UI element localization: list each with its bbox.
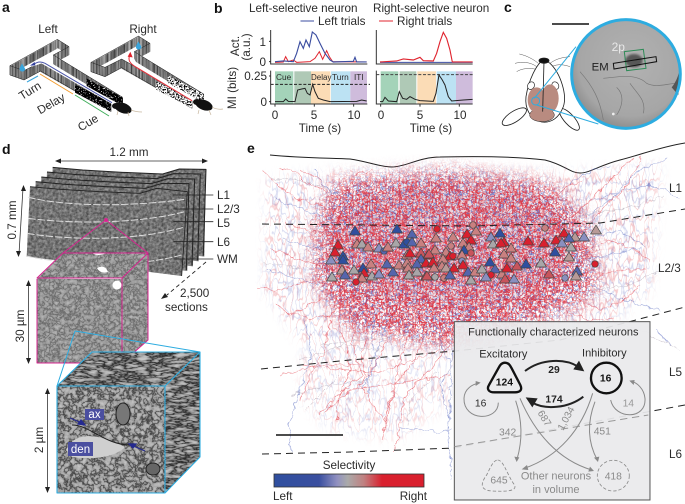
x tick labels: 10 <box>347 109 361 122</box>
chart labels: task epochs: ITI <box>354 72 364 82</box>
x tick labels: 5 <box>417 109 424 122</box>
layer labels: WM <box>217 253 238 266</box>
y tick labels: 0 <box>259 56 266 69</box>
legend: trial types: Left trials <box>318 15 366 28</box>
neuron reconstruction: red branches <box>258 155 650 450</box>
icon: mouse left <box>112 100 142 116</box>
inset: connectivity diagram: 418 <box>605 471 622 482</box>
scale bar <box>276 434 343 436</box>
legend: trial types: Right trials <box>397 15 452 28</box>
inset: cranial window image <box>572 20 681 128</box>
cortical layer labels: L6 <box>669 448 682 461</box>
inset: connectivity diagram <box>454 322 650 500</box>
inset: connectivity diagram: 451 <box>594 426 611 437</box>
cortical layer labels: L2/3 <box>658 262 681 275</box>
inset: connectivity diagram: 1,034 <box>556 405 578 432</box>
layer labels: L5 <box>217 217 231 230</box>
layer labels <box>217 189 240 266</box>
y tick labels: 1 <box>259 36 266 49</box>
chart labels: task epochs: Cue <box>276 72 292 82</box>
x axis title left: Time (s) <box>299 122 341 135</box>
neuron reconstruction: dense arbor texture <box>255 150 680 450</box>
inset: connectivity diagram: 124 <box>496 377 513 388</box>
inset: connectivity diagram: 29 <box>548 365 560 376</box>
inset: connectivity diagram: Inhibitory <box>582 348 627 360</box>
label: delay: Delay <box>35 91 68 117</box>
chart: right-selective neuron activity and MI <box>376 30 473 107</box>
chart labels: task epochs: Delay <box>311 73 331 82</box>
heading: Right: Right <box>129 23 157 36</box>
inset: connectivity diagram: 14 <box>623 399 634 410</box>
inset: connectivity diagram: in volume <box>532 484 579 496</box>
layer labels: L6 <box>217 236 230 249</box>
heading: Left: Left <box>38 23 58 36</box>
label: dendrite: den <box>71 444 90 456</box>
maze: left trial <box>10 39 123 112</box>
inset: connectivity diagram: Functionally characterized neurons <box>468 327 639 339</box>
x tick labels: 5 <box>311 109 318 122</box>
layer boundary: L2/3 to L5 <box>261 307 685 369</box>
layer boundary: L5 to L6 <box>262 405 685 454</box>
excitatory and inhibitory somata <box>326 222 602 285</box>
x tick labels: 0 <box>378 109 385 122</box>
magenta zoom cube <box>37 218 148 363</box>
scale bar <box>552 23 589 25</box>
arrow: delay <box>40 74 73 94</box>
inset: cranial window image: 2p <box>612 40 625 54</box>
panel e: reconstructed neurons <box>247 140 685 503</box>
inset: connectivity diagram: 342 <box>499 427 517 438</box>
icon: mouse head and brain <box>500 47 598 133</box>
arrow: axon marker <box>70 418 85 425</box>
layer boundary: L1 to L2/3 <box>262 209 685 226</box>
y tick labels: 0.25 <box>244 70 267 83</box>
panel a: T-maze task <box>2 0 223 134</box>
label: axon: ax <box>88 409 101 421</box>
inset: connectivity diagram: 174 <box>545 395 563 406</box>
pia surface line <box>270 143 685 173</box>
heading: left-selective neuron: Left-selective neuron <box>249 2 358 15</box>
inset: cranial window image: EM <box>592 62 609 74</box>
legend: selectivity colour bar: Left <box>273 490 293 503</box>
chart labels: task epochs <box>276 72 364 82</box>
heading: right-selective neuron: Right-selective neuron <box>373 2 489 15</box>
cortical layer labels <box>658 182 682 461</box>
dimension: sections <box>161 262 210 314</box>
inset: connectivity diagram: 16 <box>600 374 612 385</box>
dimension: 1.2 mm <box>55 146 208 164</box>
tissue section stack <box>26 167 213 276</box>
cortical layer labels: L5 <box>669 366 682 379</box>
dimension: 0.7 mm: 0.7 mm <box>6 201 19 239</box>
maze: right trial <box>91 36 204 108</box>
legend: selectivity colour bar <box>273 459 428 503</box>
inset: connectivity diagram: 16 <box>475 399 487 410</box>
label: cue: Cue <box>76 112 101 134</box>
axis label: a.u.: (a.u.) <box>240 33 253 61</box>
x tick labels <box>272 109 467 122</box>
legend: selectivity colour bar: Right <box>400 490 428 503</box>
cortical layer labels: L1 <box>669 182 682 195</box>
inset: connectivity diagram: 645 <box>490 476 508 487</box>
label: axon <box>85 409 104 421</box>
x tick labels: 10 <box>453 109 467 122</box>
dimension: 30 um: 30 µm <box>14 310 27 342</box>
dimension: 2 um <box>33 388 50 493</box>
label: dendrite <box>68 442 93 456</box>
chart labels: task epochs: Turn <box>332 72 349 82</box>
inset: connectivity diagram: Excitatory <box>479 349 528 361</box>
dimension: 1.2 mm: 1.2 mm <box>110 146 148 159</box>
panel c: cranial window <box>500 0 681 133</box>
blue zoom cube <box>57 331 200 493</box>
arrow: turn <box>27 76 38 82</box>
panel d: EM volume <box>2 141 240 493</box>
inset: connectivity diagram: Other neurons <box>521 471 592 483</box>
y tick labels: 0 <box>260 96 267 109</box>
legend: selectivity colour bar: Selectivity <box>323 459 375 472</box>
icon: mouse right <box>193 97 223 115</box>
y tick labels <box>244 36 267 109</box>
label e: e <box>247 140 255 156</box>
label: turn: Turn <box>17 79 44 103</box>
x axis title right: Time (s) <box>410 122 452 135</box>
dimension: 2 um: 2 µm <box>33 427 46 453</box>
dimension: sections: sections <box>165 301 208 314</box>
dimension: sections: 2,500 <box>180 287 210 300</box>
chart: left-selective neuron activity and MI <box>269 30 370 107</box>
legend: trial types <box>300 15 452 28</box>
x tick labels: 0 <box>272 109 279 122</box>
dimension: 0.7 mm <box>6 185 26 257</box>
arrow: cue <box>75 95 109 116</box>
axis label: activity: Act. <box>229 36 242 56</box>
layer labels: L2/3 <box>217 203 240 216</box>
dimension: 30 um <box>14 280 31 364</box>
neuron reconstruction: pale branches <box>262 178 680 425</box>
arrow: dendrite marker <box>129 444 145 451</box>
label d: d <box>2 141 11 157</box>
panel b: selectivity traces <box>214 0 489 135</box>
inset: connectivity diagram: 687 <box>535 409 553 429</box>
axis label: MI: MI (bits) <box>226 67 239 109</box>
neuron reconstruction: blue branches <box>268 158 680 480</box>
layer labels: L1 <box>217 189 230 202</box>
label b: b <box>214 0 223 16</box>
